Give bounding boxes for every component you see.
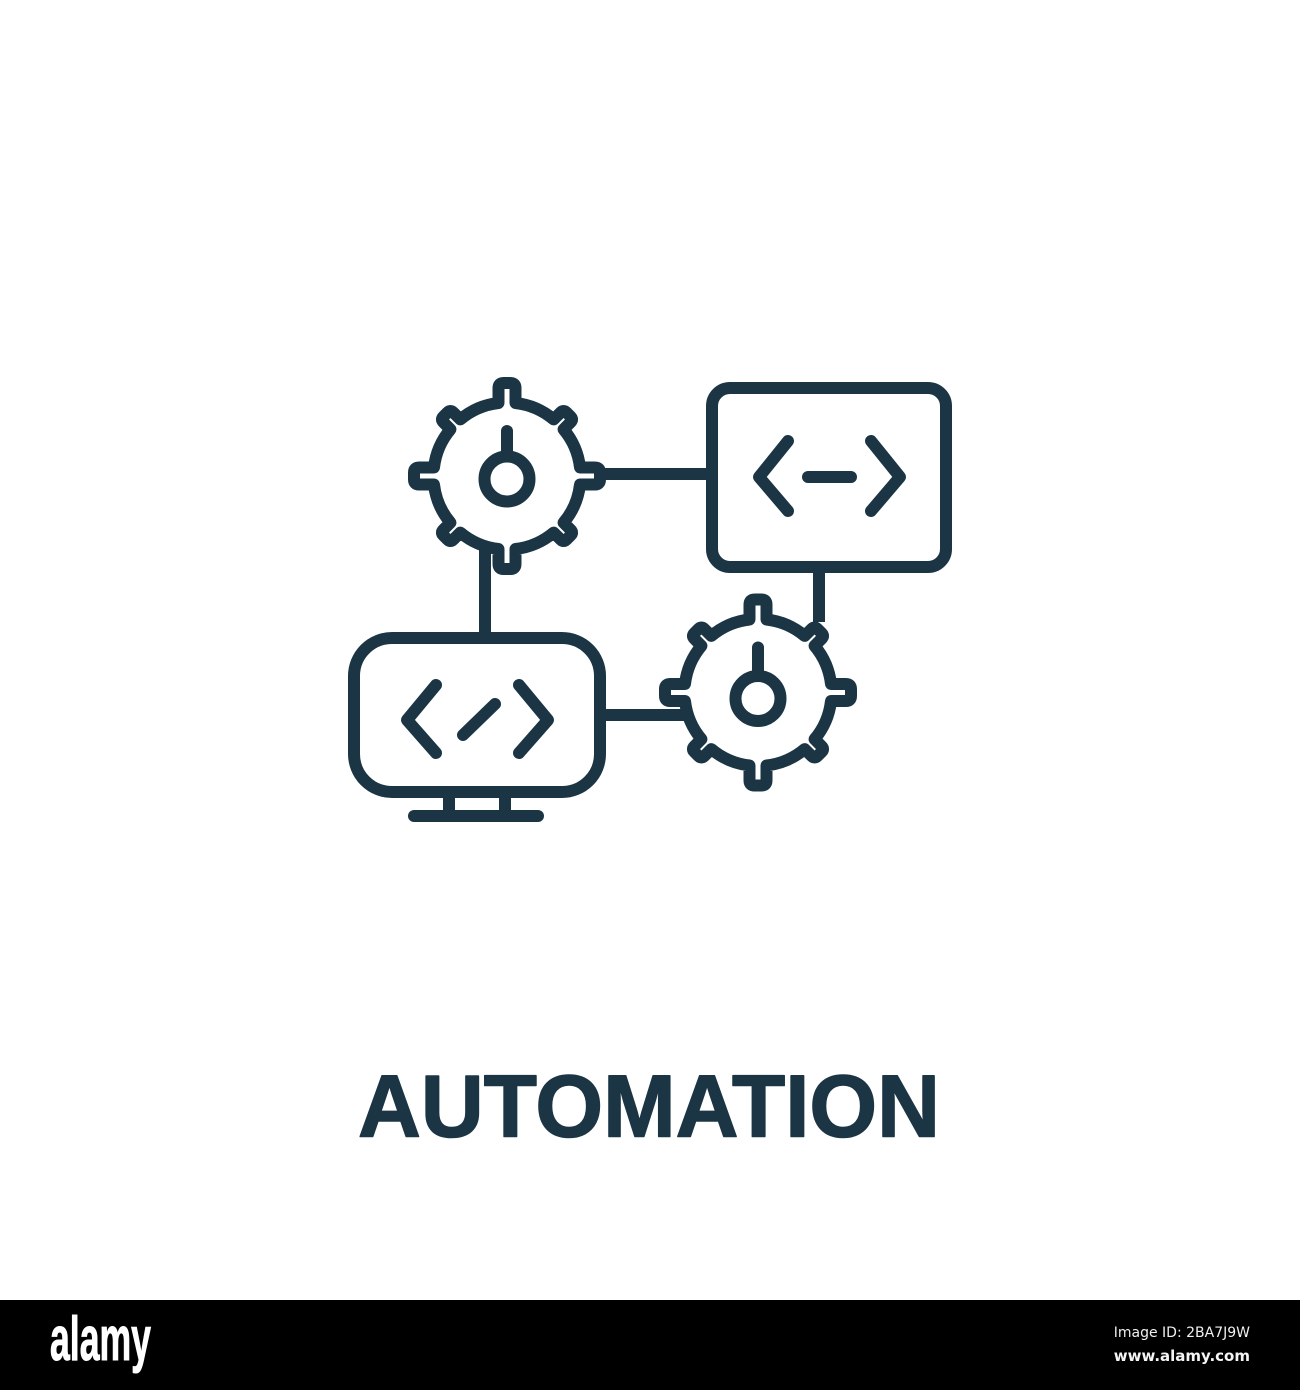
image id: Image ID: 2BA7J9W: [1114, 1325, 1250, 1341]
title: AUTOMATION: [358, 1056, 940, 1156]
left chevron: [759, 441, 788, 511]
gear outline: [665, 600, 851, 786]
gear pointer: [501, 431, 513, 456]
gear pointer: [752, 648, 764, 676]
connector: top gear to monitor: [479, 545, 491, 638]
right chevron: [871, 441, 900, 511]
window frame: [712, 388, 946, 567]
website: www.alamy.com: [1114, 1347, 1250, 1365]
connector: monitor to lower gear: [600, 709, 692, 721]
connector: top gear to top-right window: [600, 468, 712, 480]
monitor frame: [354, 638, 600, 792]
alamy logo: alamy: [50, 1305, 151, 1374]
icon: lower gear: [665, 600, 851, 786]
icon: top gear: [414, 383, 600, 569]
left chevron: [407, 685, 436, 753]
dash: [808, 471, 851, 483]
connector: top-right window to lower gear: [813, 567, 825, 622]
right chevron: [519, 685, 548, 753]
gear outline: [414, 383, 600, 569]
monitor base: [414, 810, 538, 822]
footer background: [0, 1300, 1300, 1390]
footer bar: [0, 1300, 1300, 1390]
gear hub: [484, 456, 530, 502]
gear hub: [736, 676, 780, 721]
automation icon: [354, 383, 946, 816]
monitor stand legs: [449, 792, 505, 816]
icon: code monitor: [354, 638, 600, 816]
slash: [463, 704, 495, 735]
icon: top-right code window: [712, 388, 946, 567]
